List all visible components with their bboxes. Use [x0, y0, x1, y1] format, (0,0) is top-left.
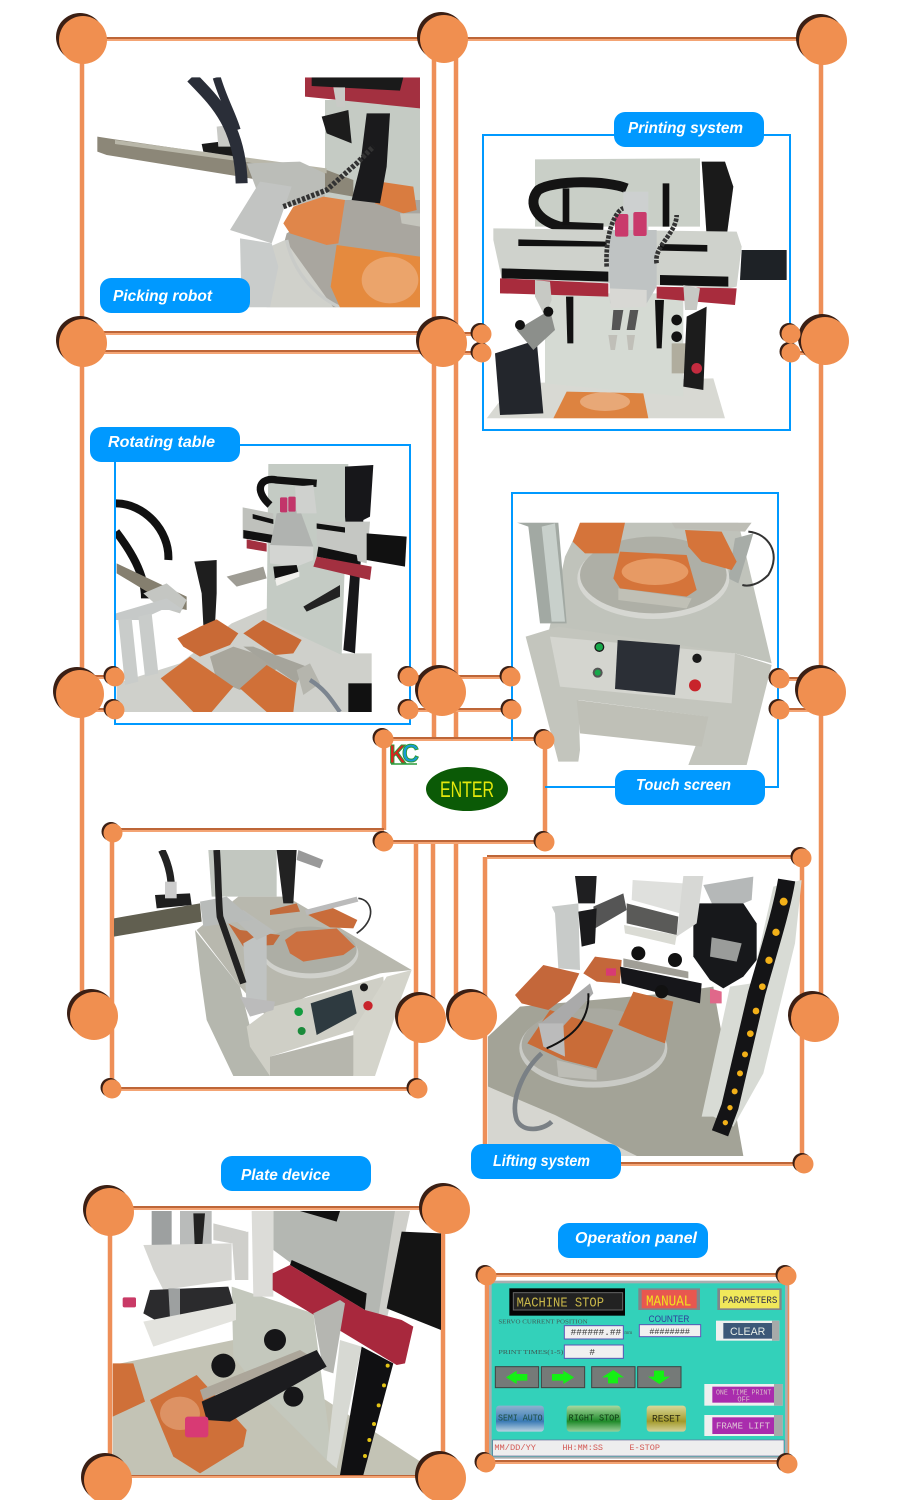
status bar: E-STOP — [629, 1443, 660, 1453]
reset button — [647, 1406, 686, 1432]
one time print button: ONE TIME PRINT — [716, 1389, 771, 1397]
label: printing system — [614, 112, 764, 147]
connector nodes: small — [100, 323, 814, 1474]
arrow buttons — [495, 1367, 681, 1388]
servo position field — [498, 1318, 632, 1339]
reset button: RESET — [652, 1413, 681, 1424]
label: operation panel: Operation panel — [575, 1230, 698, 1247]
label: rotating table: Rotating table — [108, 434, 215, 451]
label: rotating table — [90, 427, 240, 462]
logo: KC: K — [389, 739, 406, 769]
servo position field: ######.## — [571, 1327, 621, 1338]
photo: plate device — [113, 1211, 441, 1475]
status bar — [493, 1440, 784, 1456]
right stop button — [567, 1406, 621, 1432]
enter button — [426, 767, 508, 811]
print times field: PRINT TIMES(1-5) — [498, 1349, 563, 1356]
label: picking robot — [100, 278, 250, 313]
blue panel frames — [115, 135, 790, 787]
photo: lifting system — [488, 876, 802, 1156]
logo: KC: C — [402, 740, 419, 768]
clear button — [716, 1321, 779, 1341]
clear button: CLEAR — [730, 1326, 765, 1338]
right stop button: RIGHT STOP — [569, 1413, 620, 1424]
photo: rotating table — [116, 464, 407, 712]
servo position field: mm — [624, 1331, 632, 1336]
photo: front view — [114, 850, 412, 1076]
parameters button: PARAMETERS — [723, 1295, 777, 1307]
servo position field: SERVO CURRENT POSITION — [498, 1318, 588, 1325]
print times field: # — [589, 1347, 595, 1358]
logo: KC — [389, 739, 419, 769]
label: picking robot: Picking robot — [113, 288, 213, 305]
counter field: COUNTER — [649, 1314, 690, 1324]
label: touch screen — [615, 770, 765, 805]
label: plate device — [221, 1156, 371, 1191]
manual button — [638, 1288, 700, 1310]
label: lifting system: Lifting system — [493, 1153, 590, 1170]
semi auto button: SEMI AUTO — [498, 1413, 543, 1424]
machine stop display: MACHINE STOP — [517, 1296, 604, 1312]
connector lines — [80, 38, 825, 1478]
label: operation panel — [558, 1223, 708, 1258]
label: touch screen: Touch screen — [636, 777, 731, 794]
frame lift button — [704, 1415, 783, 1436]
print times field — [498, 1345, 623, 1358]
photo: printing system — [487, 158, 787, 418]
counter field — [639, 1314, 701, 1337]
machine stop display — [509, 1288, 625, 1316]
status bar: HH:MM:SS — [562, 1443, 603, 1453]
frame lift button: FRAME LIFT — [716, 1422, 771, 1432]
one time print button — [704, 1384, 783, 1406]
enter box — [387, 739, 542, 839]
manual button: MANUAL — [646, 1294, 691, 1310]
label: printing system: Printing system — [628, 120, 743, 137]
counter field: ######## — [649, 1327, 690, 1337]
status bar: MM/DD/YY — [494, 1443, 537, 1453]
parameters button — [717, 1288, 782, 1310]
one time print button: OFF — [737, 1396, 750, 1404]
semi auto button — [496, 1406, 544, 1432]
label: lifting system — [471, 1144, 621, 1179]
photo: picking robot — [97, 77, 420, 307]
enter button: ENTER — [440, 777, 494, 802]
photo: touch screen — [517, 523, 774, 765]
operation panel screen — [489, 1281, 788, 1459]
label: plate device: Plate device — [241, 1167, 330, 1184]
